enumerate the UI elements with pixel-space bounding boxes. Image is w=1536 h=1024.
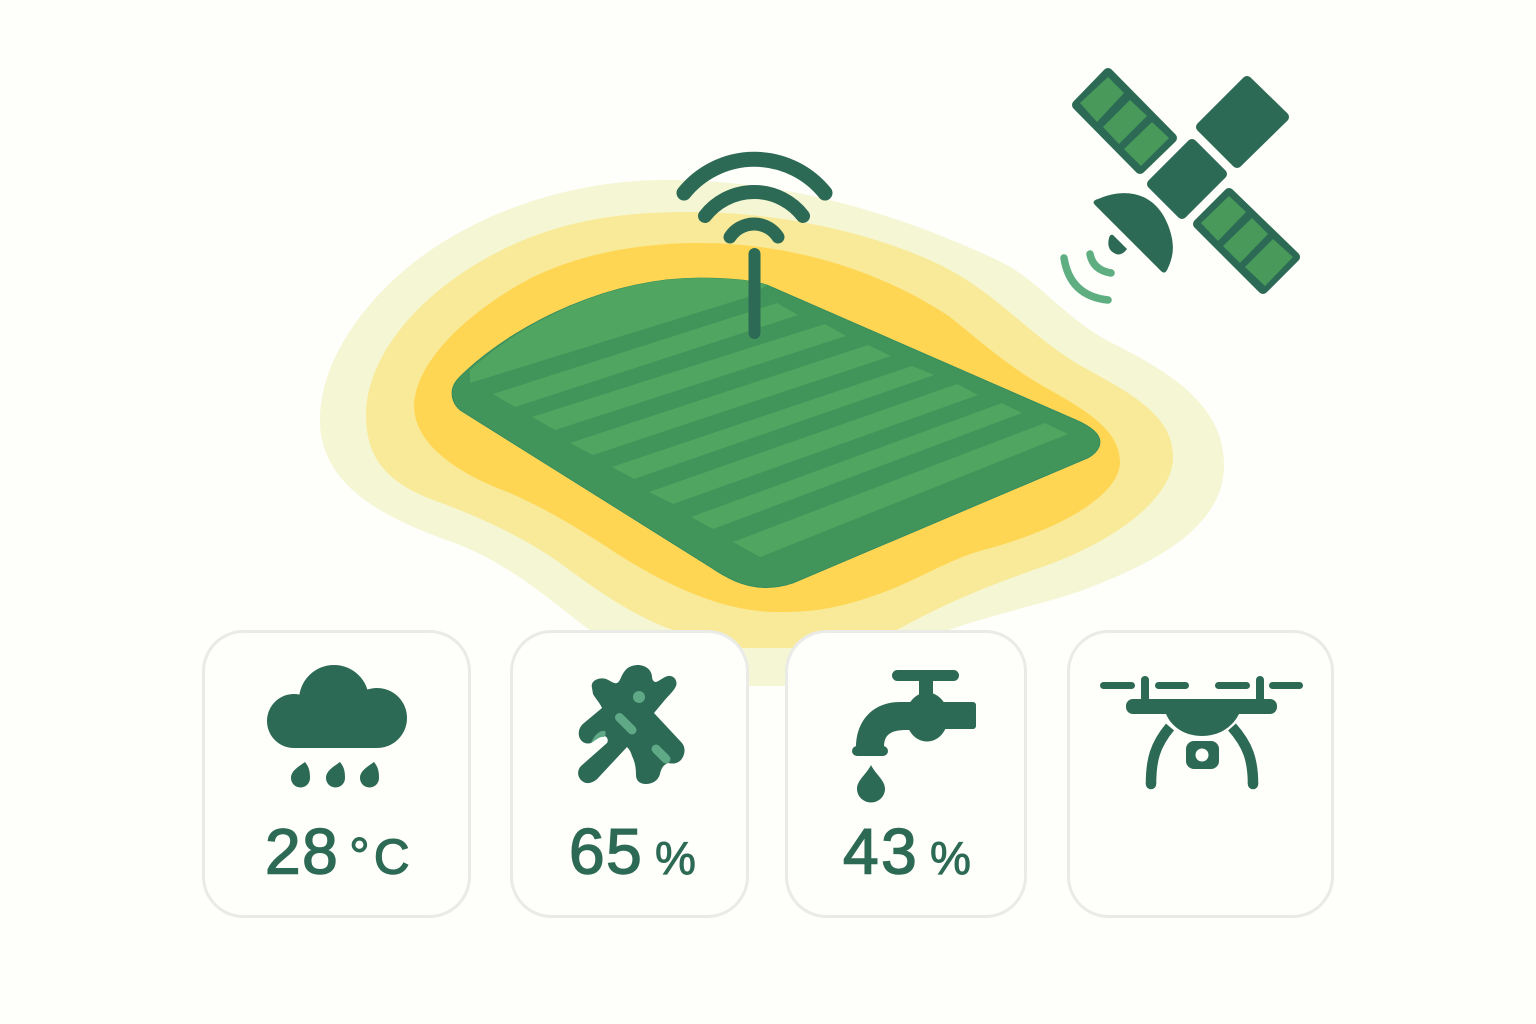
temperature reading: C [374,830,409,884]
card: irrigation [786,632,1026,916]
card: temperature [204,632,470,916]
temperature reading: ° [349,828,370,886]
middle yellow zone [366,212,1173,648]
antenna with wifi signal [684,159,825,333]
card frame [512,632,748,916]
humidity reading: 65 [569,816,643,888]
humidity reading: % [655,832,696,884]
satellite body [1152,144,1222,214]
icon: rain cloud [267,665,407,788]
inner golden zone [414,243,1120,612]
card frame [786,632,1026,916]
card: drone [1068,632,1332,916]
dish feed [1108,235,1127,254]
icon: satellite [1064,73,1295,300]
water level reading: 43 [843,816,919,888]
card: soil humidity [512,632,748,916]
satellite dish [1094,193,1173,273]
outer pale zone [320,180,1224,686]
water level reading: % [930,832,971,884]
crop field [452,278,1100,588]
water level reading [843,816,971,888]
card frame [204,632,470,916]
humidity reading [569,816,696,888]
dark panel top right [1201,81,1284,163]
heat zones around field [320,180,1224,686]
satellite signal waves [1064,254,1111,300]
solar panel bottom right [1198,193,1295,289]
temperature reading: 28 [265,816,339,888]
icon: drone [1100,676,1303,789]
temperature reading [265,816,409,888]
crop rows [493,303,1068,557]
icon: water tap [852,670,976,802]
wifi arcs [684,159,825,237]
field base [452,278,1100,588]
antenna mast [748,254,760,333]
icon: crop pest blob [578,665,685,784]
card frame [1068,632,1332,916]
solar panel top left [1077,73,1172,169]
field top light area [470,278,767,383]
